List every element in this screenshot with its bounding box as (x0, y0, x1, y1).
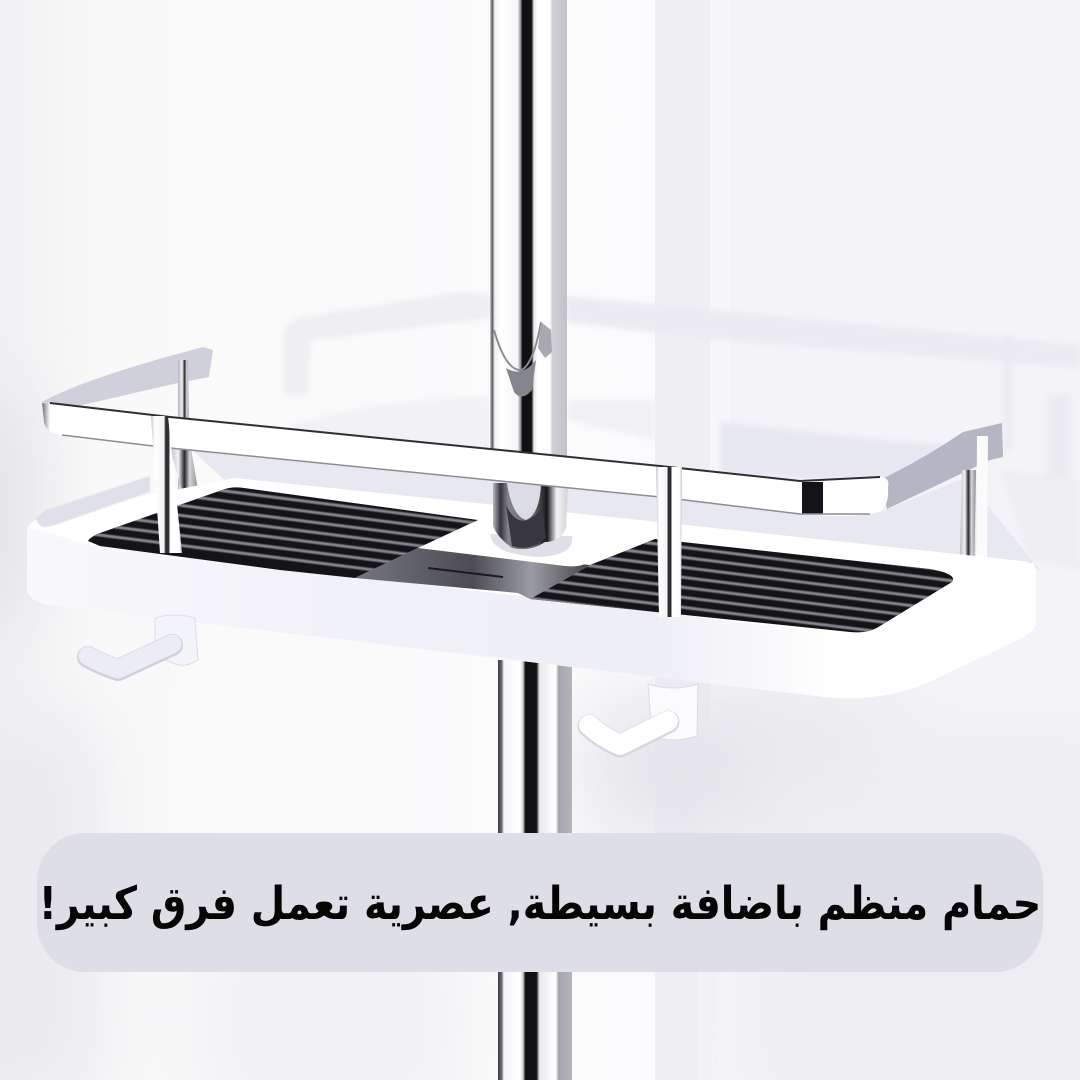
blurred shelf reflection (250, 292, 1080, 570)
main chrome pole upper (490, 0, 567, 530)
front post left (151, 416, 182, 553)
lavender gap behind rail (192, 450, 1040, 570)
mat left (88, 487, 478, 578)
caption text: حمام منظم باضافة بسيطة, عصرية تعمل فرق كبير! (39, 878, 1041, 931)
rear pole reflection (655, 0, 730, 1080)
centre dark plate (355, 547, 590, 599)
hook left (88, 615, 198, 670)
front rail (42, 403, 888, 516)
rail left bend (42, 403, 62, 435)
back rail right (880, 423, 1003, 588)
shelf tray (27, 476, 1036, 698)
rail dark reflection (802, 482, 823, 514)
plate slot (428, 568, 503, 577)
pole collar at shelf (493, 483, 568, 549)
white collar plate (418, 517, 643, 566)
tray body (27, 478, 1036, 698)
rail bottom edge (62, 435, 870, 514)
tray inner left rim (36, 476, 150, 527)
front post right (656, 467, 682, 617)
pole bracket reflection (494, 322, 541, 370)
tray front face (27, 527, 1036, 698)
rail top edge (50, 403, 880, 481)
caption banner (37, 833, 1043, 972)
soft wall shading (0, 400, 1080, 1080)
hook right (589, 684, 698, 746)
back rail left (42, 347, 213, 490)
mat right (530, 539, 954, 632)
main chrome pole lower (498, 660, 572, 1080)
